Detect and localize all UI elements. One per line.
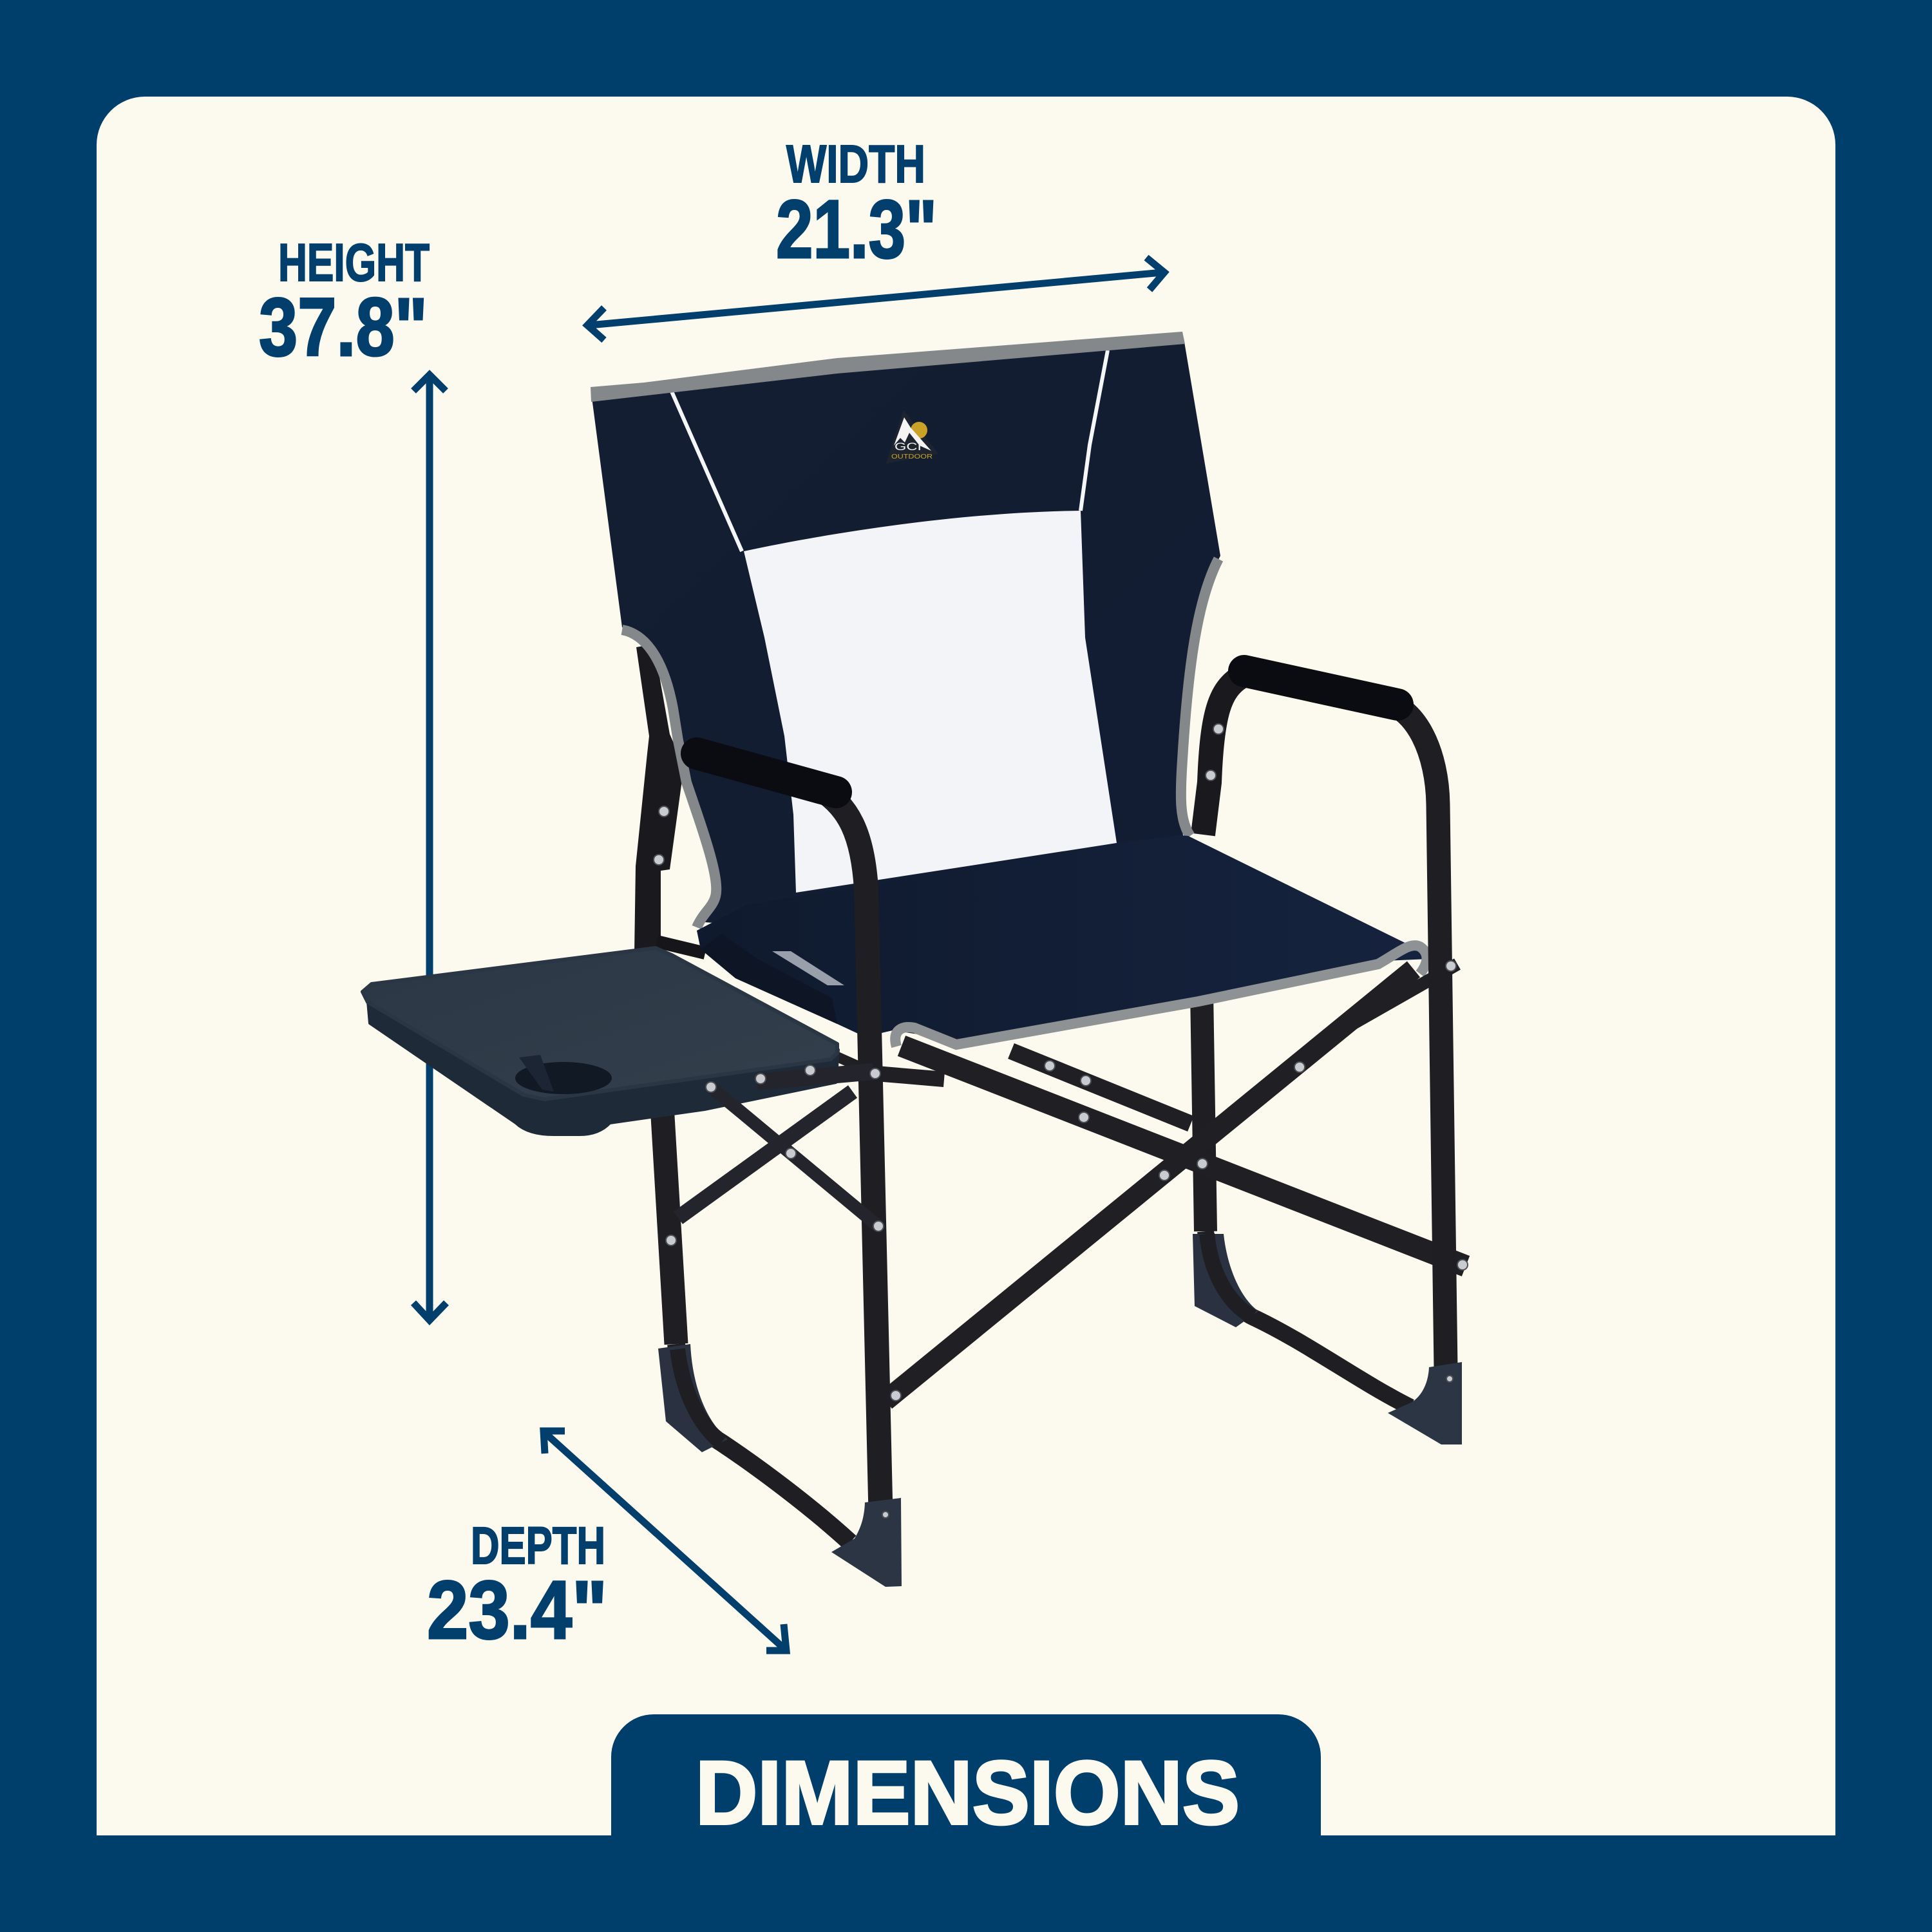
label: width: WIDTH bbox=[786, 134, 925, 194]
label: height bbox=[259, 232, 430, 374]
label: depth: DEPTH bbox=[471, 1517, 605, 1575]
label: depth: 23.4" bbox=[427, 1564, 607, 1656]
front foot caps bbox=[831, 1362, 1462, 1587]
rear foot caps bbox=[658, 1234, 1258, 1452]
logo badge: OUTDOOR bbox=[891, 453, 933, 460]
side bindings bbox=[622, 559, 1218, 927]
rear left foot tube overlay bbox=[677, 1349, 721, 1443]
arrow: width bbox=[587, 258, 1164, 340]
cross braces bbox=[836, 964, 1466, 1401]
seat bbox=[657, 835, 1429, 1046]
rear legs and runners bbox=[661, 992, 1410, 1542]
left strap bar bbox=[657, 942, 705, 953]
arrow: height bbox=[413, 375, 446, 1320]
logo badge: GCI bbox=[895, 440, 922, 453]
mesh panel bbox=[744, 511, 1117, 893]
arrow: depth bbox=[543, 1431, 786, 1651]
piping bbox=[672, 350, 1108, 551]
rivets bbox=[654, 724, 1468, 1518]
label: depth bbox=[427, 1517, 607, 1656]
cup holder bbox=[515, 1062, 612, 1094]
cup holder tab bbox=[519, 1055, 554, 1092]
arm pads bbox=[697, 671, 1397, 792]
label: width bbox=[776, 134, 937, 276]
tray top bbox=[363, 948, 837, 1099]
seat binding bbox=[895, 945, 1427, 1046]
rear right foot tube overlay bbox=[1207, 1234, 1253, 1317]
chair bbox=[363, 332, 1468, 1587]
logo badge bbox=[889, 414, 935, 461]
seat tag bbox=[772, 951, 844, 985]
seat cloth bbox=[697, 835, 1429, 1040]
back frame uprights bbox=[634, 644, 1240, 953]
chair back fabric bbox=[591, 332, 1220, 927]
title tab bbox=[611, 1714, 1321, 1843]
seat pocket strap bbox=[701, 934, 837, 1024]
top binding bbox=[591, 332, 1185, 402]
title: dimensions: DIMENSIONS bbox=[696, 1742, 1240, 1843]
side tray bbox=[363, 948, 838, 1135]
label: height: 37.8" bbox=[259, 281, 428, 374]
label: height: HEIGHT bbox=[278, 232, 430, 292]
label: width: 21.3" bbox=[776, 184, 937, 276]
tray side bbox=[368, 1001, 838, 1135]
front right leg and arm tube bbox=[1385, 702, 1446, 1368]
tray support braces bbox=[678, 1072, 879, 1227]
back panel bbox=[591, 338, 1220, 927]
front left leg and arm tube bbox=[817, 787, 881, 1526]
